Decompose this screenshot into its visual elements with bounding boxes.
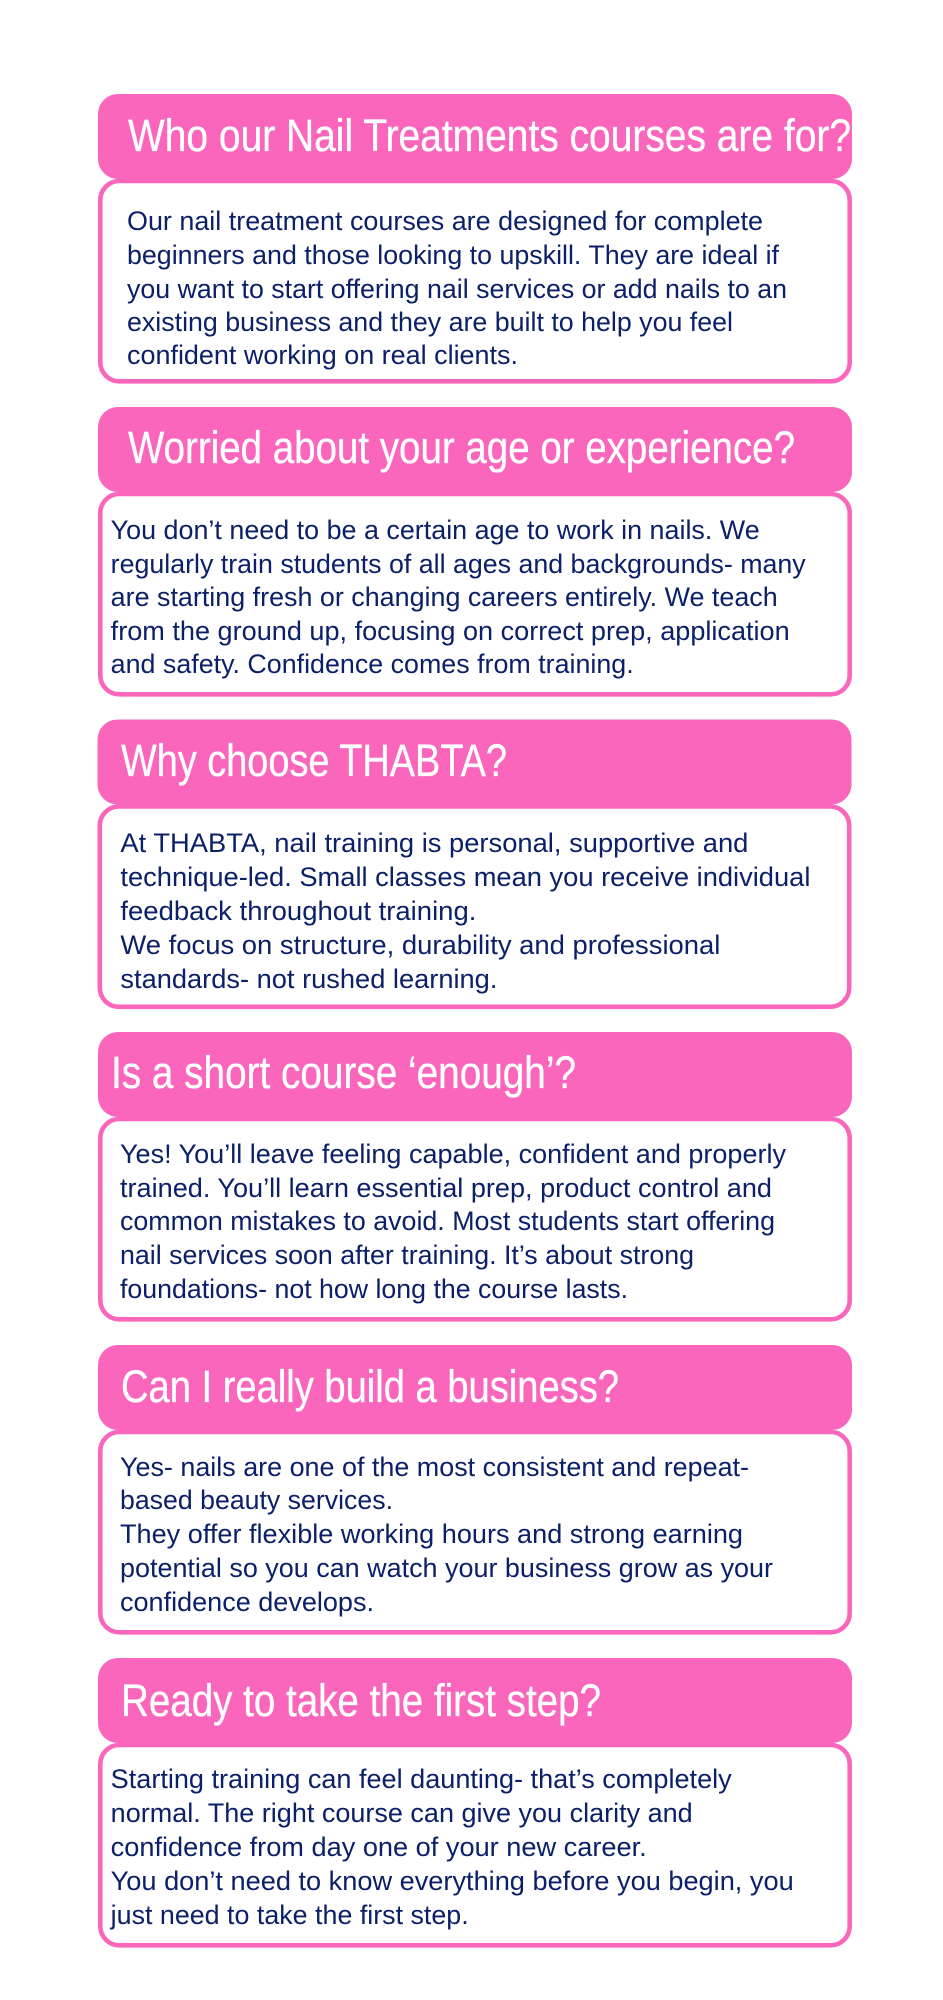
heading: Can I really build a business? [121,1361,619,1412]
body box [100,494,850,694]
body text: common mistakes to avoid. Most students start offering [120,1206,775,1236]
body text: confidence develops. [120,1587,374,1617]
header bar [98,94,852,179]
body text [120,1139,787,1304]
body text: nail services soon after training. It’s about strong [120,1240,694,1270]
body text: technique-led. Small classes mean you receive individual [120,862,810,892]
body text: At THABTA, nail training is personal, supportive and [120,828,748,858]
body text: We focus on structure, durability and professional [120,930,720,960]
body text: are starting fresh or changing careers entirely. We teach [111,582,778,612]
body text: Starting training can feel daunting- that’s completely [111,1764,732,1794]
body text [111,515,806,679]
body text: standards- not rushed learning. [120,964,497,994]
body text: feedback throughout training. [120,896,476,926]
header bar [98,1658,852,1743]
header bar [98,407,852,492]
panel: ready to take the first step [98,1658,852,1945]
body text: Our nail treatment courses are designed for complete [127,206,763,236]
header bar [98,1032,852,1117]
panel: is a short course enough [98,1032,852,1319]
body text: from the ground up, focusing on correct prep, application [111,616,790,646]
heading: Worried about your age or experience? [128,422,795,473]
body text: confident working on real clients. [127,340,518,370]
body box [100,1119,850,1319]
body text: foundations- not how long the course lasts. [120,1274,628,1304]
header bar [98,720,852,804]
body box [100,181,850,381]
body text [110,1764,794,1930]
body text: Yes- nails are one of the most consistent and repeat- [120,1452,749,1482]
body box [100,806,849,1007]
panel: can I really build a business [98,1345,852,1632]
body text: trained. You’ll learn essential prep, product control and [120,1173,772,1203]
panel: worried about age or experience [98,407,852,694]
panel: why choose THABTA [98,720,852,1007]
body text: normal. The right course can give you clarity and [111,1798,693,1828]
heading: Ready to take the first step? [121,1675,601,1726]
heading: Who our Nail Treatments courses are for? [128,110,851,161]
body text: They offer flexible working hours and strong earning [120,1519,743,1549]
body box [100,1432,850,1632]
body text: beginners and those looking to upskill. They are ideal if [127,240,780,270]
body text: You don’t need to be a certain age to work in nails. We [111,515,760,545]
body box [100,1745,850,1945]
body text: you want to start offering nail services or add nails to an [127,274,787,304]
body text [120,1452,773,1617]
body text: potential so you can watch your business grow as your [120,1553,773,1583]
body text: just need to take the first step. [110,1900,469,1930]
heading: Why choose THABTA? [121,735,507,786]
panel: who the courses are for [98,94,852,381]
body text [127,206,787,370]
heading: Is a short course ‘enough’? [111,1047,576,1098]
body text [120,828,810,994]
body text: based beauty services. [120,1485,393,1515]
body text: regularly train students of all ages and backgrounds- many [111,549,806,579]
body text: existing business and they are built to help you feel [127,307,733,337]
body text: Yes! You’ll leave feeling capable, confident and properly [120,1139,787,1169]
body text: You don’t need to know everything before you begin, you [111,1866,794,1896]
body text: confidence from day one of your new career. [111,1832,647,1862]
header bar [98,1345,852,1430]
body text: and safety. Confidence comes from training. [111,649,634,679]
